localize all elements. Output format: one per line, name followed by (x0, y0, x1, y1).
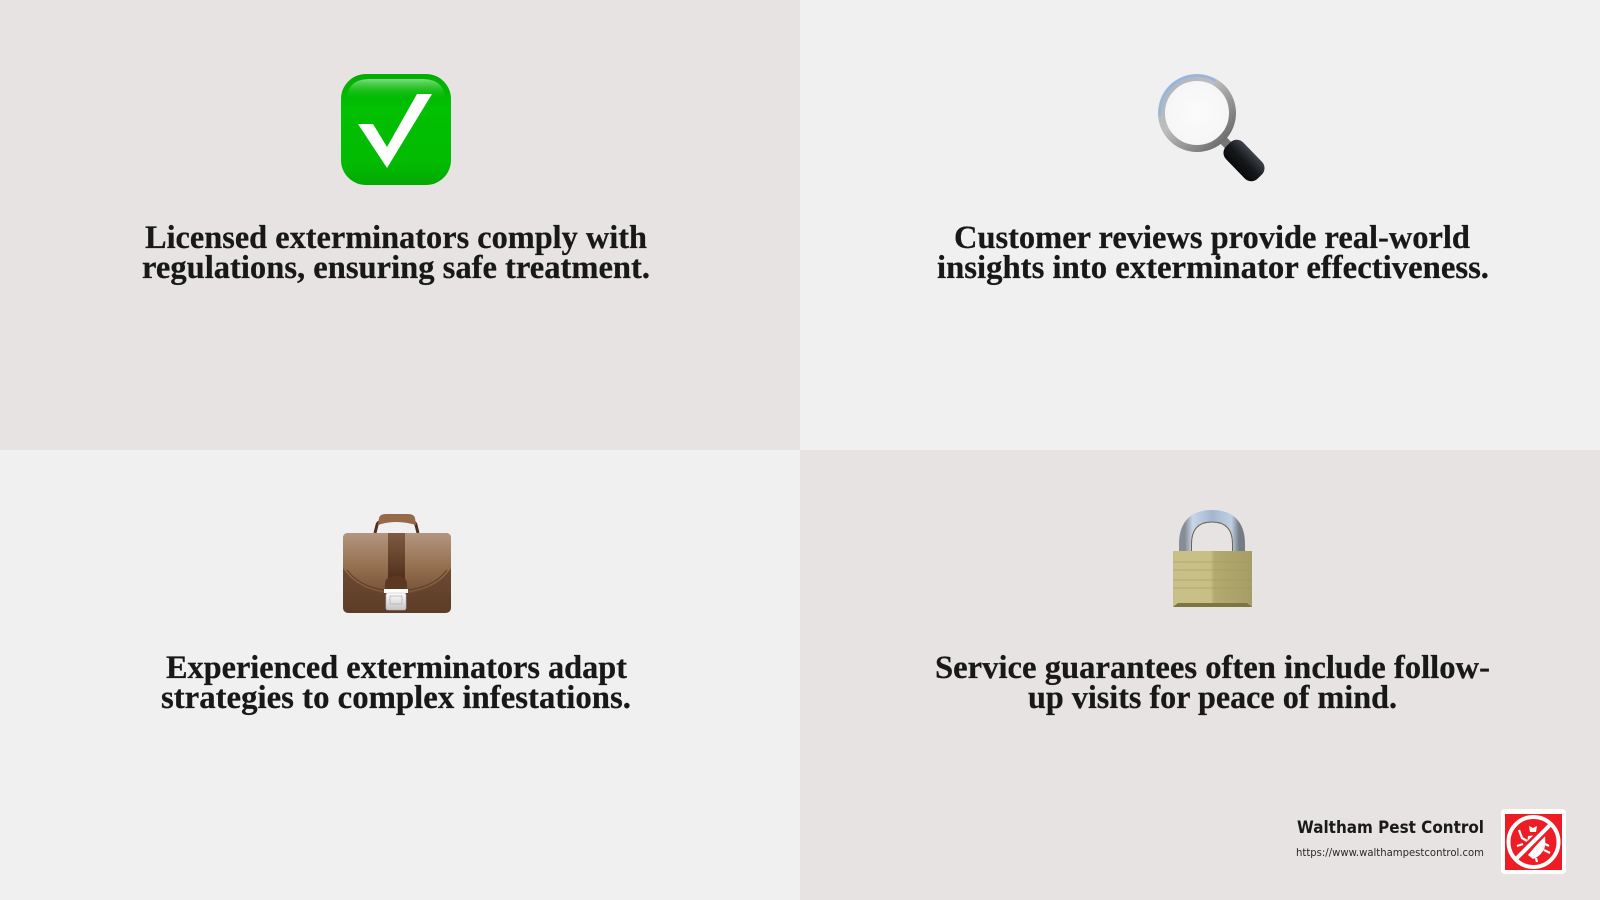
heading: customer reviews: insights into exterminator effectiveness. (937, 250, 1489, 286)
panel: licensed exterminators (0, 0, 800, 450)
heading: customer reviews: Customer reviews provide real-world (954, 220, 1470, 256)
brand name: Waltham Pest Control (1297, 818, 1484, 837)
heading: licensed exterminators: Licensed exterminators comply with (145, 220, 647, 256)
heading: service guarantees: up visits for peace of mind. (1028, 680, 1397, 716)
heading: licensed exterminators (142, 220, 650, 286)
heading: service guarantees (935, 650, 1490, 716)
icon: magnifying glass (1160, 76, 1268, 185)
icon: green check mark (341, 74, 451, 185)
icon: no-pest logo (1501, 809, 1566, 874)
heading: experienced exterminators: Experienced exterminators adapt (166, 650, 627, 686)
heading: experienced exterminators (161, 650, 631, 716)
icon: briefcase (343, 514, 451, 613)
heading: experienced exterminators: strategies to complex infestations. (161, 680, 631, 716)
heading: customer reviews (937, 220, 1489, 286)
panel: customer reviews (800, 0, 1600, 450)
icon: padlock (1173, 516, 1252, 607)
panel: service guarantees (800, 450, 1600, 900)
footer: brand (1296, 809, 1566, 874)
heading: service guarantees: Service guarantees often include follow- (935, 650, 1490, 686)
panel: experienced exterminators (0, 450, 800, 900)
brand url: https://www.walthampestcontrol.com (1296, 847, 1484, 859)
heading: licensed exterminators: regulations, ensuring safe treatment. (142, 250, 650, 286)
